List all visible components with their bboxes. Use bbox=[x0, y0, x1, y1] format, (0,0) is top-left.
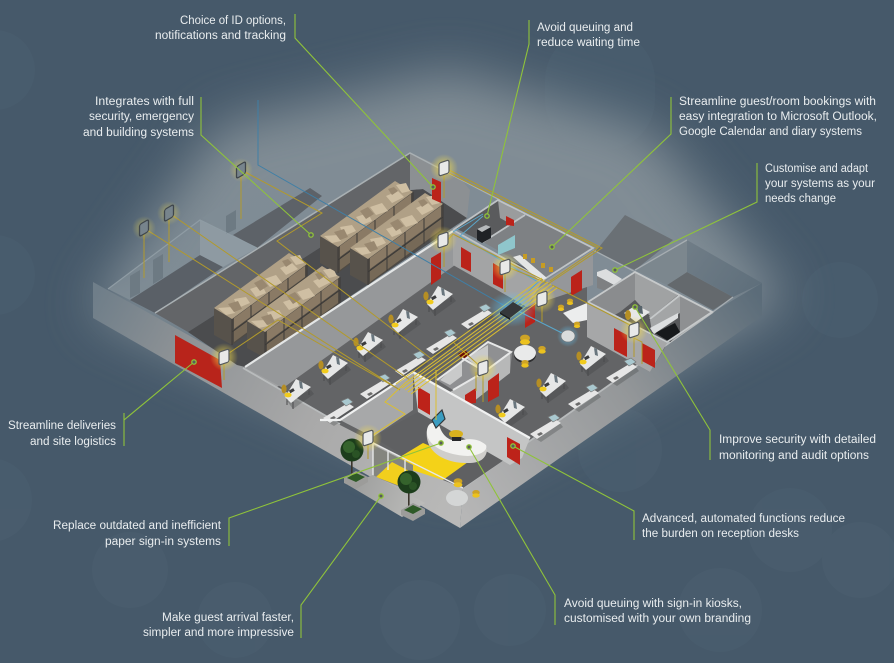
callout: paper systems bbox=[53, 520, 222, 548]
callout: customise bbox=[765, 163, 875, 205]
callout: deliveries: Streamline deliveries bbox=[8, 420, 116, 432]
front round table bbox=[446, 490, 468, 506]
ceiling camera bbox=[557, 325, 579, 347]
round table bbox=[514, 345, 536, 361]
office desks bbox=[281, 286, 639, 442]
glass front entrance bbox=[373, 445, 413, 492]
open-plan office floor bbox=[277, 265, 667, 488]
meeting room screen bbox=[498, 235, 515, 255]
yellow reception carpet bbox=[390, 443, 468, 480]
breakout furniture bbox=[514, 299, 587, 368]
callout: paper systems: Replace outdated and inefficient bbox=[53, 520, 222, 532]
callout: security: monitoring and audit options bbox=[719, 450, 869, 462]
warehouse racks of boxes bbox=[214, 181, 443, 358]
callout: kiosks bbox=[564, 598, 751, 625]
callout: deliveries bbox=[8, 420, 116, 448]
callout: avoid queuing: Avoid queuing and bbox=[537, 22, 633, 34]
upper middle rooms bbox=[432, 178, 593, 328]
office front low wall line bbox=[243, 312, 713, 488]
pod back wall faces bbox=[440, 360, 462, 385]
callout: ID options: Choice of ID options, bbox=[180, 15, 286, 27]
callout: kiosks: customised with your own branding bbox=[564, 613, 751, 625]
callout: customise: Customise and adapt bbox=[765, 163, 869, 175]
security box room bbox=[587, 272, 712, 372]
network hub bbox=[488, 291, 536, 327]
green callout lines bbox=[124, 14, 757, 638]
callout: bookings: easy integration to Microsoft Outlook, bbox=[679, 111, 877, 123]
warehouse bay bbox=[155, 153, 500, 388]
callout: customise: your systems as your bbox=[765, 178, 875, 190]
gold access control wiring bbox=[144, 170, 642, 459]
door in dividing wall bbox=[431, 252, 441, 285]
callout: deliveries: and site logistics bbox=[30, 436, 116, 448]
callout: ID options: notifications and tracking bbox=[155, 30, 286, 42]
callout: paper systems: paper sign-in systems bbox=[105, 536, 221, 548]
callout: integrates: and building systems bbox=[83, 127, 194, 139]
callout: automated functions: the burden on reception desks bbox=[642, 528, 799, 540]
sign-in kiosk bbox=[432, 410, 445, 428]
callout: integrates: Integrates with full bbox=[95, 96, 194, 108]
callout: automated functions bbox=[642, 513, 845, 540]
server cabinet bbox=[477, 225, 491, 243]
right back room fading bbox=[593, 215, 762, 312]
reception long wall bbox=[413, 372, 530, 465]
callout: guest arrival: Make guest arrival faster, bbox=[162, 612, 294, 624]
callout: kiosks: Avoid queuing with sign-in kiosks, bbox=[564, 598, 742, 610]
meeting room table bbox=[513, 255, 547, 281]
warehouse dividing wall bbox=[245, 231, 455, 388]
meeting chairs bbox=[523, 254, 553, 272]
reception chair and monitor bbox=[449, 430, 463, 438]
callout: bookings: Google Calendar and diary systems bbox=[679, 126, 862, 138]
blue network cables bbox=[258, 100, 568, 336]
trees and planters bbox=[340, 438, 368, 489]
callout: integrates: security, emergency bbox=[89, 111, 194, 123]
security room doors bbox=[614, 328, 655, 368]
callout: ID options bbox=[155, 15, 286, 42]
callout: bookings: Streamline guest/room bookings with bbox=[679, 96, 876, 108]
security desk bbox=[624, 305, 650, 322]
callout: avoid queuing: reduce waiting time bbox=[537, 37, 640, 49]
soft light behind building bbox=[90, 70, 790, 480]
callout: guest arrival bbox=[143, 612, 294, 639]
warehouse loading door bbox=[175, 335, 222, 388]
reception side wall bbox=[340, 372, 413, 437]
reception desk bbox=[427, 423, 487, 463]
callout: customise: needs change bbox=[765, 193, 836, 205]
callout: guest arrival: simpler and more impressive bbox=[143, 627, 294, 639]
access sensors bbox=[132, 154, 648, 452]
reception doors bbox=[418, 387, 520, 465]
building slab left face bbox=[93, 282, 463, 528]
upper room doors bbox=[432, 178, 582, 328]
callout: automated functions: Advanced, automated functions reduce bbox=[642, 513, 845, 525]
pod doors bbox=[465, 373, 499, 404]
callout: bookings bbox=[679, 96, 877, 138]
isometric building bbox=[93, 100, 762, 528]
printer counter bbox=[597, 269, 622, 285]
meeting table right bbox=[563, 303, 587, 323]
reception area bbox=[320, 372, 530, 521]
meeting pods near reception bbox=[437, 342, 512, 406]
callout: avoid queuing bbox=[537, 22, 640, 49]
entrance pavement bbox=[348, 475, 425, 517]
callout: security bbox=[719, 434, 876, 462]
callout: integrates bbox=[83, 96, 194, 139]
server rack black bbox=[655, 323, 680, 342]
callout: security: Improve security with detailed bbox=[719, 434, 876, 446]
building slab right face bbox=[460, 283, 762, 528]
left storage rooms bbox=[108, 150, 322, 313]
